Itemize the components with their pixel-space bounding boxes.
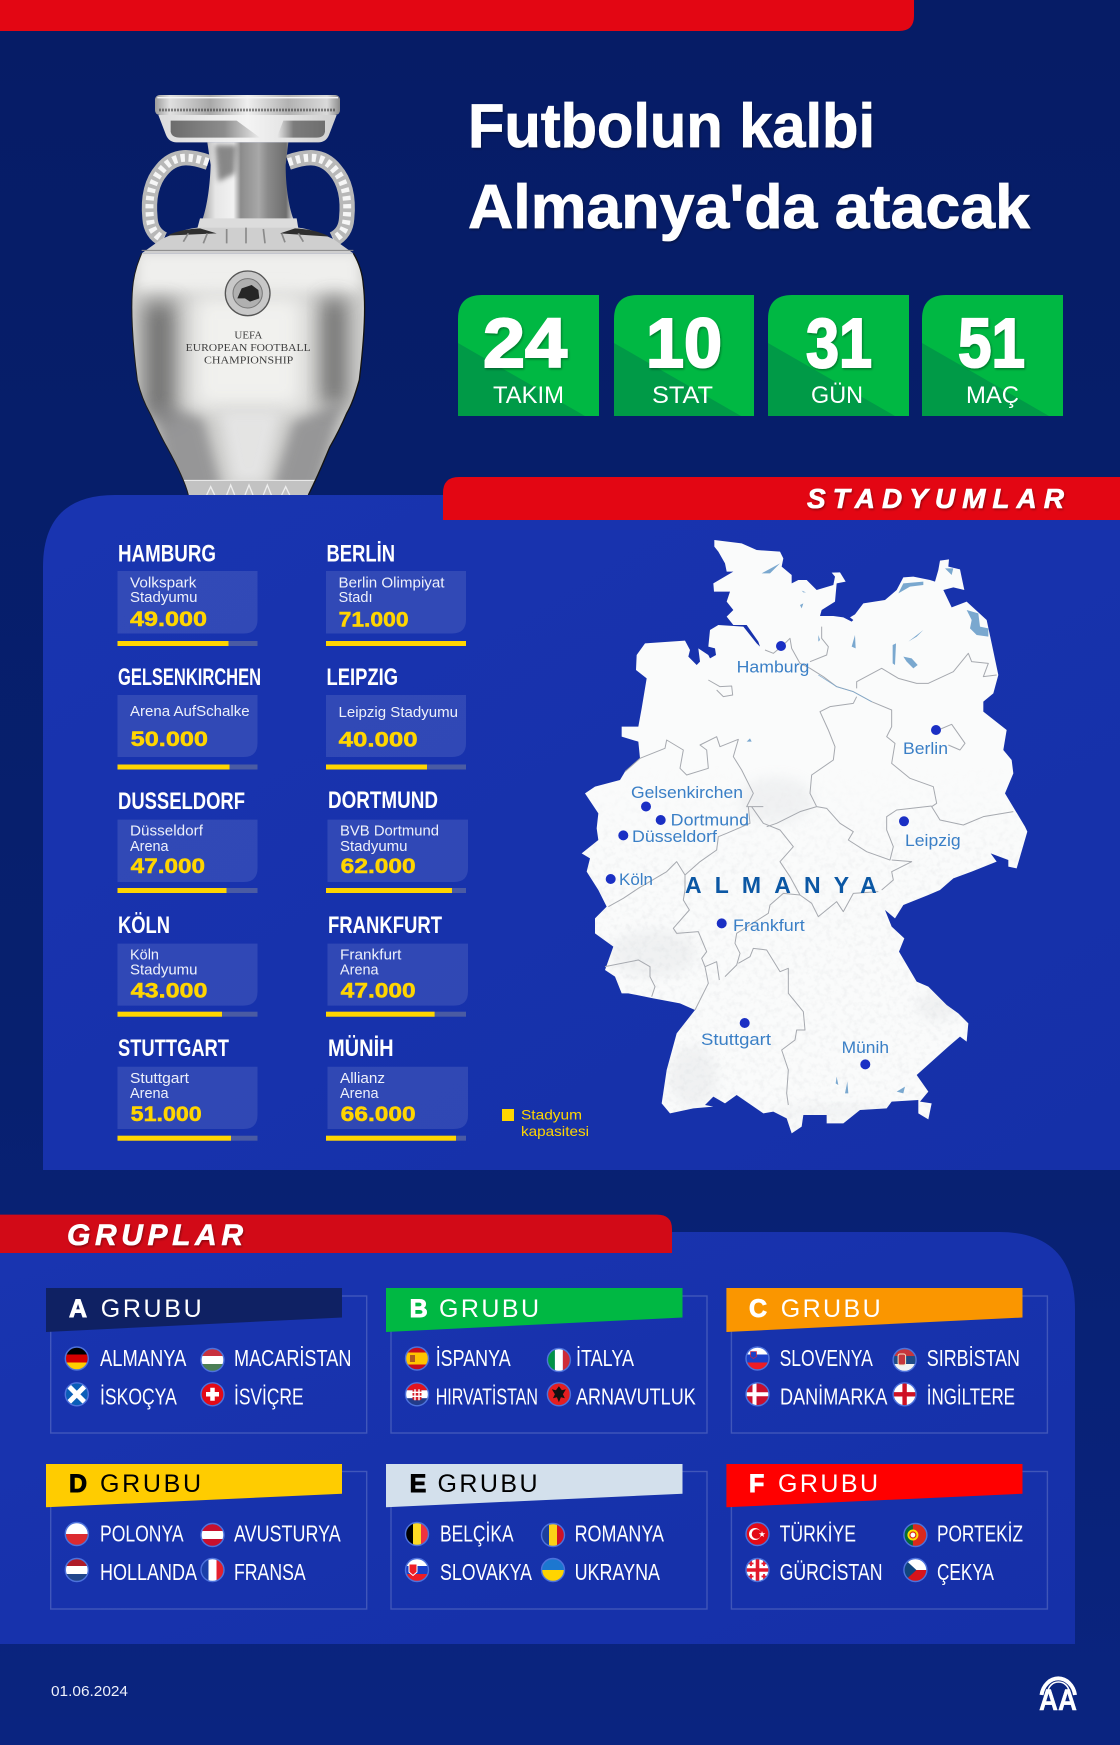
stadium: Berlin [326,540,466,646]
legend: stadium capacity: Stadyum [521,1107,582,1123]
stat card: 51 maç: MAÇ [966,382,1019,409]
stadium: Frankfurt: Arena [340,961,379,978]
stadium: Leipzig [326,664,466,770]
group A: MACARİSTAN [234,1345,351,1371]
heading bar: gruplar [0,1215,672,1253]
flag: Romania [542,1524,564,1546]
flag: Poland [66,1523,88,1545]
stadium: Köln [118,912,258,1017]
flag: Serbia [894,1349,916,1371]
heading bar: stadyumlar: STADYUMLAR [807,483,1065,514]
flag: Switzerland [202,1384,224,1406]
flag rings [65,1347,927,1582]
flag: Austria [202,1524,224,1546]
trophy emblem [225,271,270,316]
stadium: Stuttgart: Arena [130,1085,169,1102]
group B: B [410,1295,428,1323]
stadium: Stuttgart [118,1035,258,1141]
stadium: Köln: KÖLN [118,912,170,939]
stadium: Leipzig: Leipzig Stadyumu [338,704,458,721]
flag: Spain [406,1348,428,1370]
map labels: Stuttgart [701,1030,771,1049]
group E: SLOVAKYA [440,1559,533,1585]
panel: groups [0,1232,1075,1644]
flag: Albania [548,1384,570,1406]
stat card: 24 takım [458,295,599,416]
group E: GRUBU [438,1470,538,1498]
trophy inscription: CHAMPIONSHIP [204,355,293,367]
group F: F [749,1470,764,1498]
heading bar: stadyumlar [443,477,1120,520]
flag: Scotland [66,1384,88,1406]
stadium: Hamburg: HAMBURG [118,540,216,568]
group C: SIRBİSTAN [927,1345,1020,1371]
group A: İSVİÇRE [234,1383,304,1409]
stat card: 10 stat: STAT [652,382,713,409]
stadium: Münih: Allianz [340,1070,385,1087]
icon: trophy [127,95,370,498]
stadium: Düsseldorf: DUSSELDORF [118,788,245,815]
group E: E [410,1470,426,1498]
stadium: Dortmund: BVB Dortmund [340,823,439,840]
group A: A [69,1295,87,1323]
stadium: Hamburg: Stadyumu [130,589,198,606]
stadium: Köln: Köln [130,947,159,964]
group E [386,1464,707,1609]
trophy bowl [158,115,337,142]
group D: D [69,1470,87,1498]
stadium: Berlin: Berlin Olimpiyat [338,575,445,592]
group F [726,1464,1047,1609]
map labels: Münih [842,1038,889,1057]
trophy handles [149,158,347,239]
flag: Slovenia [746,1348,768,1370]
stadium: Stuttgart: STUTTGART [118,1035,229,1062]
stat card: 10 stat [614,295,754,416]
group F: ÇEKYA [937,1559,994,1585]
stadium: Berlin: Stadı [338,589,372,606]
group F: TÜRKİYE [780,1521,856,1547]
group C: GRUBU [781,1295,881,1323]
stat card: 51 maç [922,295,1063,416]
group D [46,1464,367,1609]
legend: stadium capacity [502,1107,589,1139]
stadium: Köln: 43.000 [131,979,208,1002]
group A: GRUBU [101,1295,202,1323]
stadium: Leipzig: 40.000 [339,729,418,752]
map labels: Leipzig [905,831,961,850]
stadium: Hamburg: Volkspark [130,575,197,592]
stadium: Gelsenkirchen [118,664,261,770]
flag: Netherlands [66,1559,88,1581]
group E: ROMANYA [575,1521,665,1547]
title [468,92,1031,242]
stat card: 51 maç: 51 [958,304,1025,382]
group D: FRANSA [234,1559,306,1585]
stadium: Münih: Arena [340,1085,379,1102]
stadium: Gelsenkirchen: Arena AufSchalke [130,703,250,720]
stadium: Münih: MÜNİH [328,1035,394,1062]
group A: ALMANYA [100,1345,187,1371]
group C [726,1288,1047,1433]
group D: POLONYA [100,1521,184,1547]
stadium: Gelsenkirchen: 50.000 [131,728,208,751]
group C: C [749,1295,767,1323]
trophy shoulder [142,228,353,253]
flag: Italy [548,1349,570,1371]
map: Germany [570,540,1040,1140]
stadium: Düsseldorf [118,788,258,893]
group F: GRUBU [778,1470,878,1498]
group C: SLOVENYA [780,1345,873,1371]
stat card: 31 gün [768,295,909,416]
map labels: Hamburg [737,658,809,677]
trophy inscription: EUROPEAN FOOTBALL [186,342,311,354]
map labels: Dortmund [671,810,749,829]
flag: Portugal [904,1524,926,1546]
flag: Georgia [746,1559,768,1581]
heading bar: gruplar: GRUPLAR [67,1219,243,1252]
trophy rim [155,95,340,115]
group B: İTALYA [576,1345,635,1371]
stadium: Dortmund [326,787,468,893]
date: 01.06.2024 [51,1684,128,1700]
stat card: 24 takım: 24 [483,304,567,382]
group B: HIRVATİSTAN [436,1383,538,1409]
stat card: 31 gün: GÜN [811,382,863,409]
stadium: Düsseldorf: Düsseldorf [130,823,204,840]
stadium: Berlin: BERLİN [326,540,395,568]
stadium: Köln: Stadyumu [130,961,198,978]
stadium: Münih [326,1035,468,1141]
state borders [605,627,1013,1105]
group D: AVUSTURYA [234,1521,341,1547]
flag: France [202,1559,224,1581]
group A: İSKOÇYA [100,1383,177,1409]
trophy inscription [186,329,311,367]
stadium: Frankfurt: Frankfurt [340,947,402,964]
flag: Türkiye [746,1523,768,1545]
group A [46,1288,367,1433]
group B: İSPANYA [436,1345,511,1371]
lakes and rivers [747,563,988,1093]
group E: UKRAYNA [575,1559,661,1585]
trophy neck [203,142,293,219]
map labels: Gelsenkirchen [631,783,743,802]
flag: Croatia [406,1384,428,1405]
flag: Slovakia [406,1559,428,1581]
group B: ARNAVUTLUK [576,1383,696,1409]
stadium: Berlin: 71.000 [339,609,409,632]
group B [386,1288,707,1433]
stadium: Gelsenkirchen: GELSENKIRCHEN [118,664,261,691]
map labels: Köln [619,870,653,889]
stadium: Stuttgart: Stuttgart [130,1070,190,1087]
map labels [619,658,961,1057]
group E: BELÇİKA [440,1521,514,1547]
panel: stadiums [43,495,1120,1170]
stat card: 24 takım: TAKIM [493,382,564,409]
flag: Ukraine [542,1559,564,1581]
group B: GRUBU [439,1295,539,1323]
flag: Belgium [406,1523,428,1545]
stadium: Dortmund: 62.000 [341,855,416,878]
stat card: 10 stat: 10 [646,304,722,382]
map labels: Düsseldorf [632,827,717,846]
stadium: Frankfurt: 47.000 [341,979,416,1002]
stadium: Düsseldorf: Arena [130,838,169,855]
flag: Denmark [746,1384,768,1406]
map markers [606,641,941,1069]
group D: GRUBU [100,1470,201,1498]
map labels: Berlin [903,739,948,758]
title: Futbolun kalbi [468,92,875,161]
group C: DANİMARKA [780,1383,888,1409]
stadium: Hamburg: 49.000 [130,608,207,631]
icon: AA logo: AA [1039,1684,1077,1717]
stadium: Dortmund: DORTMUND [328,787,438,814]
stadium: Düsseldorf: 47.000 [131,855,205,878]
legend: stadium capacity: kapasitesi [521,1123,589,1139]
stat card: 31 gün: 31 [806,304,872,382]
title: Almanya'da atacak [468,173,1031,242]
group F: GÜRCİSTAN [780,1559,882,1585]
stadium: Frankfurt [326,912,468,1017]
stadium: Frankfurt: FRANKFURT [328,912,442,939]
top red bar [0,0,914,31]
stadium: Münih: 66.000 [341,1103,416,1126]
group D: HOLLANDA [100,1559,198,1585]
group F: PORTEKİZ [937,1521,1023,1547]
stadium: Hamburg [118,540,258,646]
flag: England [894,1384,916,1406]
stadium list [118,540,468,1141]
stadium: Dortmund: Stadyumu [340,838,408,855]
stadium: Leipzig: LEIPZIG [326,664,398,691]
stadium: Stuttgart: 51.000 [131,1103,202,1126]
group C: İNGİLTERE [927,1383,1015,1409]
flag: Czechia [904,1559,926,1581]
trophy inscription: UEFA [234,329,262,341]
map labels: ALMANYA [685,872,877,898]
map labels: Frankfurt [733,916,805,935]
trophy body [127,252,370,498]
flag: Hungary [202,1349,224,1371]
flag: Germany [66,1348,88,1370]
